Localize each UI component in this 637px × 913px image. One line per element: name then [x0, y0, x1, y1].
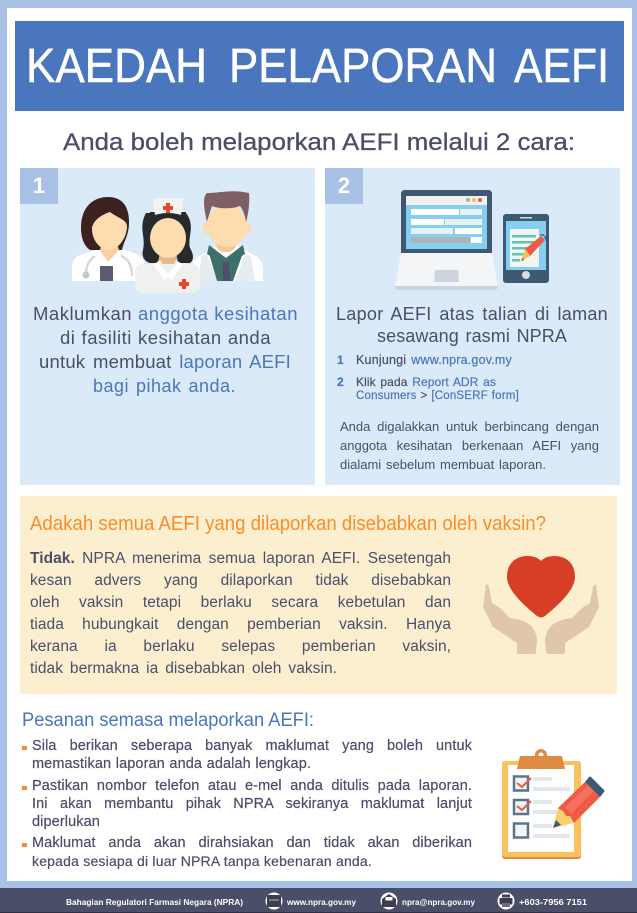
list: reminders — [22, 738, 472, 870]
reminder 2: Ini akan membantu pihak NPRA sekiranya maklumat lanjut — [32, 796, 472, 812]
reminder 2: Pastikan nombor telefon atau e-mel anda ditulis pada laporan. — [32, 778, 472, 794]
phone: +603-7956 7151 — [519, 898, 588, 907]
icon: clipboard and pencil — [502, 749, 604, 859]
number badge 2 — [325, 168, 363, 204]
website: www.npra.gov.my — [286, 898, 357, 907]
step 2: Consumers > [ConSERF form] — [356, 390, 519, 402]
number badge 2: 2 — [338, 173, 350, 198]
heading: report online: Lapor AEFI atas talian di laman — [336, 304, 608, 324]
website — [266, 892, 357, 910]
panel: method 2 — [325, 168, 620, 485]
step 1: Kunjungi www.npra.gov.my — [356, 353, 512, 367]
panel: are all AEFI caused by vaccines — [20, 496, 617, 694]
text: answer: kesan advers yang dilaporkan tidak disebabkan — [30, 572, 451, 589]
icon: laptop and phone — [395, 190, 549, 290]
step 1: 1 — [337, 353, 344, 367]
heading: report online — [336, 304, 608, 346]
title banner: KAEDAH — [26, 40, 207, 93]
reminder 2: diperlukan — [32, 814, 100, 830]
email: npra@npra.gov.my — [402, 898, 476, 907]
step 2 — [337, 375, 519, 402]
footer organisation name: Bahagian Regulatori Farmasi Negara (NPRA) — [66, 898, 243, 907]
text: answer: tidak bermakna ia disebabkan oleh vaksin. — [30, 660, 337, 677]
icon: health workers — [72, 191, 263, 293]
reminder 3: Maklumat anda akan dirahsiakan dan tidak akan diberikan — [32, 835, 472, 851]
reminder 1: memastikan laporan anda adalah lengkap. — [32, 756, 311, 772]
text: answer — [30, 550, 451, 677]
note: discuss with health staff: dialami sebelum membuat laporan. — [340, 457, 546, 472]
number badge 1 — [20, 168, 58, 204]
text: answer: oleh vaksin tetapi berlaku secara kebetulan dan — [30, 594, 451, 611]
subtitle: Anda boleh melaporkan AEFI melalui 2 cara: — [63, 129, 575, 156]
reminder 1: Sila berikan seberapa banyak maklumat yang boleh untuk — [32, 738, 472, 754]
note: discuss with health staff — [340, 419, 599, 472]
title banner — [15, 21, 624, 111]
icon: hands holding heart — [483, 556, 599, 654]
text: method 1 description: Maklumkan anggota kesihatan — [33, 303, 298, 324]
reminder 3: kepada sesiapa di luar NPRA tanpa kebenaran anda. — [32, 853, 372, 869]
text: method 1 description: di fasiliti kesihatan anda — [60, 327, 271, 348]
heading: report online: sesawang rasmi NPRA — [377, 326, 567, 346]
text: answer: kerana ia berlaku selepas pemberian vaksin, — [30, 638, 451, 655]
heading: question: Adakah semua AEFI yang dilaporkan disebabkan oleh vaksin? — [30, 513, 546, 535]
email — [380, 892, 476, 910]
text: method 1 description: bagi pihak anda. — [93, 376, 236, 396]
step 2: Klik pada Report ADR as — [356, 375, 496, 389]
number badge 1: 1 — [33, 173, 45, 198]
footer bar — [0, 888, 637, 913]
note: discuss with health staff: Anda digalakkan untuk berbincang dengan — [340, 419, 599, 434]
title banner: AEFI — [514, 40, 609, 93]
step 2: 2 — [337, 375, 344, 389]
text: method 1 description — [33, 303, 298, 396]
text: answer: Tidak. NPRA menerima semua laporan AEFI. Sesetengah — [30, 550, 451, 567]
reminder 1 — [22, 738, 472, 772]
heading: reporting reminders: Pesanan semasa melaporkan AEFI: — [22, 710, 314, 731]
title banner: PELAPORAN — [229, 40, 497, 93]
note: discuss with health staff: anggota kesihatan berkenaan AEFI yang — [340, 438, 599, 453]
text: method 1 description: untuk membuat laporan AEFI — [39, 351, 291, 372]
text: answer: tiada hubungkait dengan pemberian vaksin. Hanya — [30, 616, 451, 633]
phone — [498, 892, 588, 910]
numbered steps — [337, 353, 519, 402]
reminder 2 — [22, 778, 472, 830]
panel: method 1 — [20, 168, 315, 485]
reminder 3 — [22, 835, 472, 870]
